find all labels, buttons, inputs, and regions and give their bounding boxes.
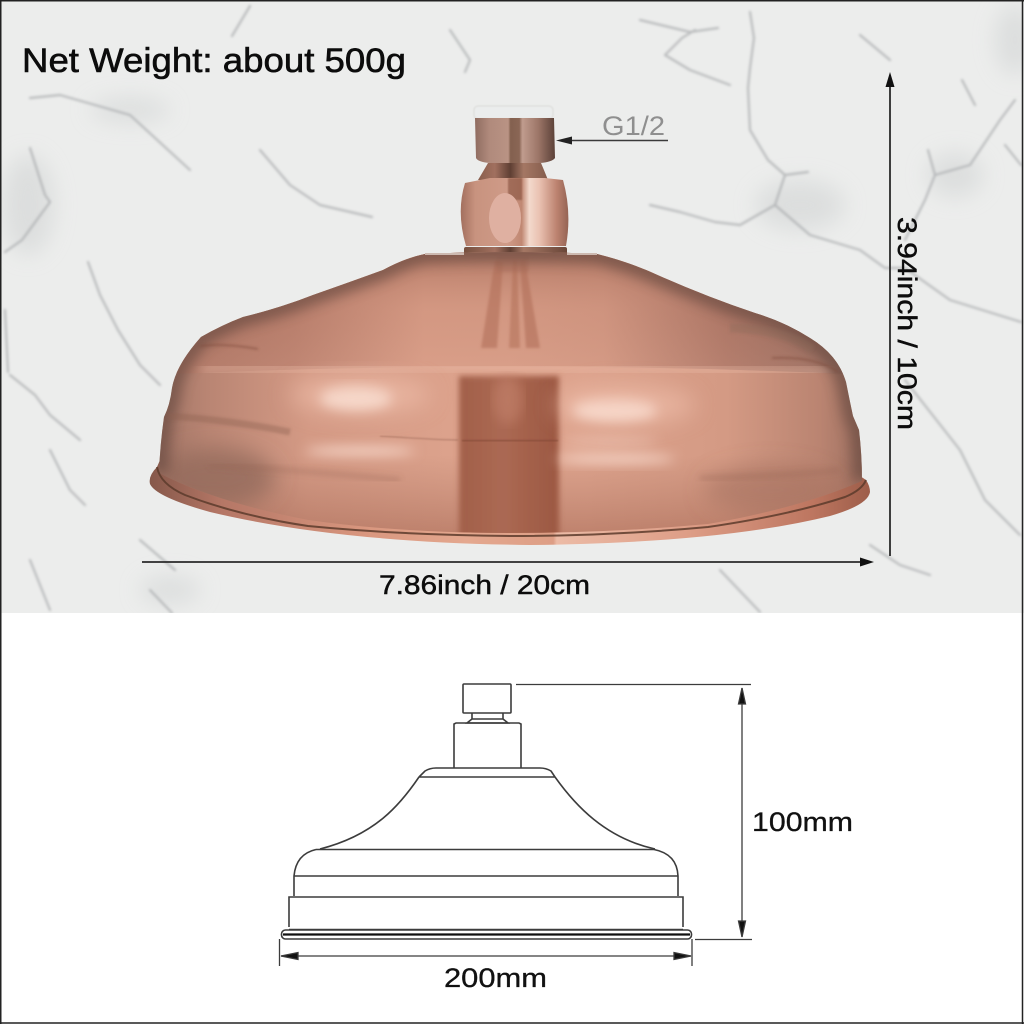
dome and skirt <box>150 245 870 545</box>
lower band <box>289 897 683 927</box>
swivel ball <box>461 178 568 246</box>
background: marble photo panel <box>0 0 1024 613</box>
marble veins <box>5 6 1021 613</box>
dome top edge <box>425 253 597 255</box>
200mm label: 200mm <box>444 963 547 993</box>
highlights <box>305 387 675 463</box>
crown line <box>316 848 654 850</box>
stem outline <box>454 723 521 768</box>
100mm label: 100mm <box>752 807 853 837</box>
crown fold line <box>200 367 830 372</box>
dome outline <box>320 768 655 849</box>
marble soft clouds <box>2 5 1024 604</box>
G1/2 callout with arrow: G1/2 <box>602 111 665 141</box>
neck outline <box>467 713 508 723</box>
rim inner dark groove <box>157 467 866 536</box>
width label: 7.86inch / 20cm <box>379 570 590 600</box>
skirt grooves <box>380 436 558 441</box>
rim base <box>150 460 870 545</box>
connector neck <box>478 163 548 180</box>
skirt outline <box>294 850 678 896</box>
shower head product photo <box>150 106 870 545</box>
edge vignette <box>159 252 862 481</box>
dome vertical reflection <box>481 256 540 348</box>
white seal on inlet <box>474 106 553 119</box>
stripe on ball <box>508 178 522 200</box>
G1/2 callout with arrow <box>556 111 668 144</box>
height dimension arrow <box>886 72 894 556</box>
title: net weight: Net Weight: about 500g <box>22 42 406 80</box>
base collar <box>464 247 567 258</box>
width dimension arrow <box>142 558 874 566</box>
technical line drawing <box>282 684 692 939</box>
height label: 3.94inch / 10cm <box>892 217 922 430</box>
200mm dimension arrow <box>280 939 692 966</box>
top connector nut <box>475 118 555 163</box>
top nut outline <box>463 684 511 713</box>
central dark band <box>459 376 559 541</box>
100mm dimension arrow <box>516 684 752 940</box>
rim <box>282 930 692 939</box>
oval plate on ball <box>489 193 521 243</box>
